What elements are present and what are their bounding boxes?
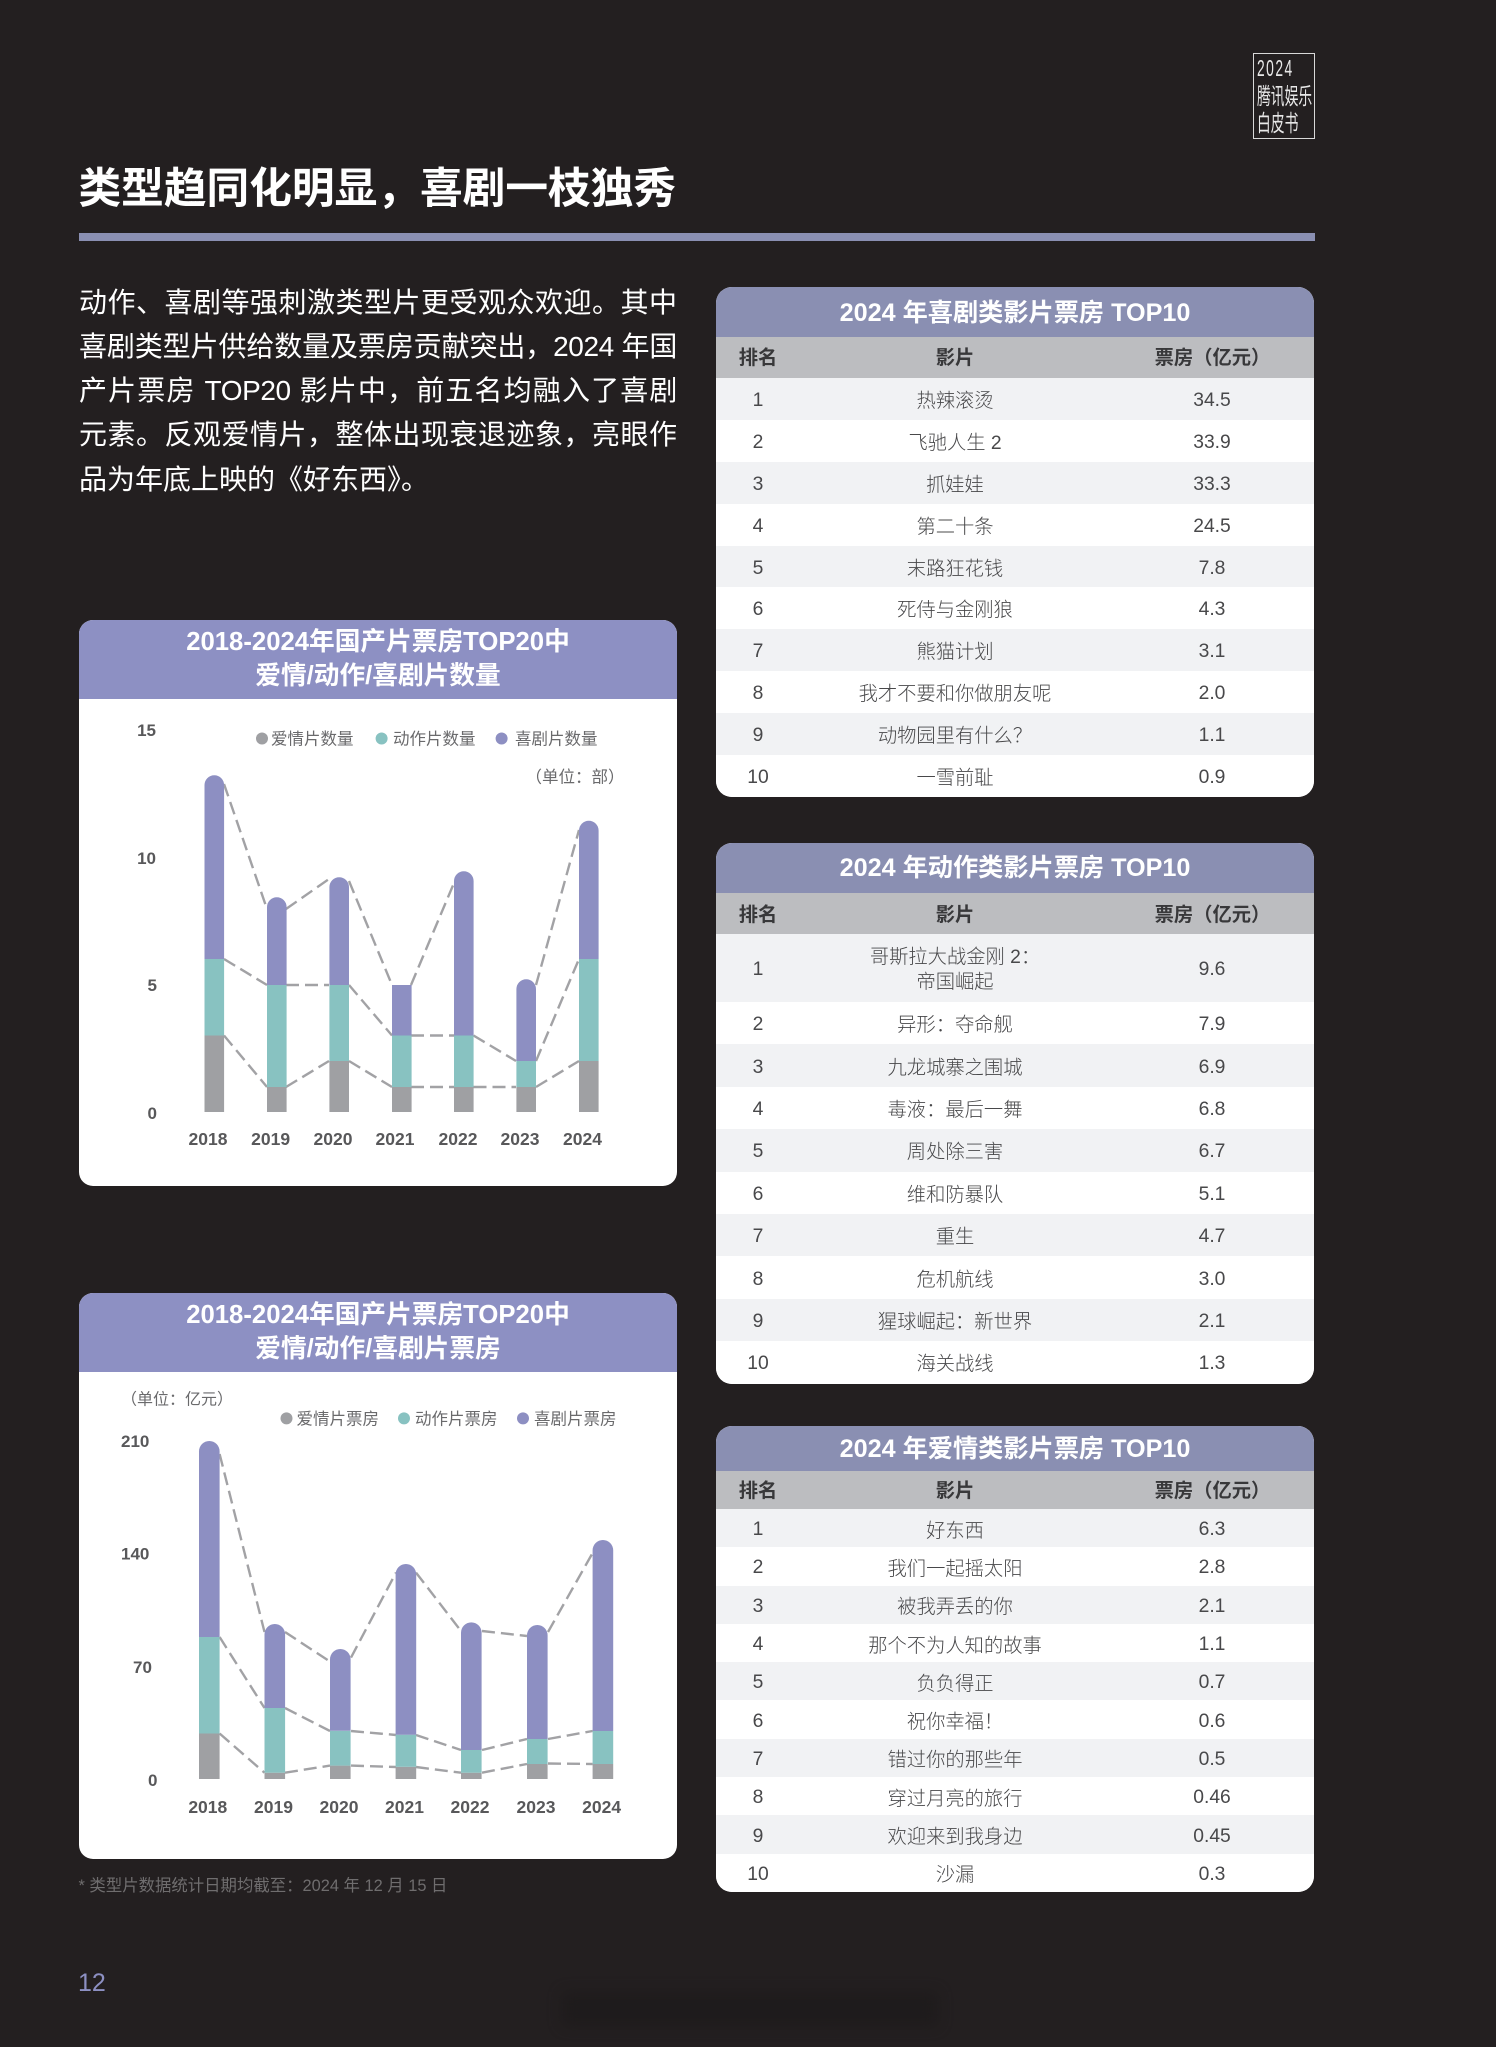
report badge: 2024 腾讯娱乐白皮书 — [1253, 53, 1315, 139]
rows: action films: 1 — [753, 959, 763, 980]
rows: comedy films — [716, 378, 1314, 797]
table: action top 10 — [716, 842, 1314, 1384]
rows: action films: 危机航线 — [916, 1270, 994, 1291]
rows: comedy films: 2.0 — [1199, 683, 1225, 704]
x axis years: 2018 — [188, 1797, 228, 1817]
intro paragraph: 产片票房 TOP20 影片中，前五名均融入了喜剧 — [79, 375, 677, 406]
y axis labels — [137, 721, 157, 1123]
column headers: 票房（亿元） — [1155, 905, 1270, 926]
bar 2024 — [579, 821, 599, 1112]
rows: action films: 3.0 — [1199, 1269, 1225, 1290]
table title: romance — [716, 1426, 1314, 1471]
rows: romance films: 7 — [753, 1749, 763, 1770]
rows: action films: 毒液：最后一舞 — [888, 1100, 1022, 1121]
rows: romance films: 那个不为人知的故事 — [868, 1636, 1042, 1657]
panel heading: box office: 2018-2024年国产片票房TOP20中 — [186, 1301, 570, 1329]
rows: action films: 重生 — [936, 1227, 974, 1248]
rows: comedy films: 末路狂花钱 — [907, 558, 1003, 580]
rows: action films: 7.9 — [1199, 1014, 1225, 1035]
rows: comedy films: 5 — [753, 558, 763, 578]
x axis years: 2022 — [451, 1797, 490, 1817]
column headers: 影片 — [936, 1481, 974, 1502]
column headers: 影片 — [936, 348, 974, 368]
rows: action films: 异形：夺命舰 — [897, 1015, 1013, 1036]
table title: romance: 2024 年爱情类影片票房 TOP10 — [840, 1434, 1190, 1462]
rows: comedy films: 4.3 — [1199, 599, 1225, 620]
rows: comedy films: 3 — [753, 474, 763, 495]
rows: romance films: 我们一起摇太阳 — [888, 1559, 1022, 1580]
rows: comedy films: 死侍与金刚狼 — [897, 600, 1013, 621]
rows: romance films: 0.45 — [1193, 1826, 1231, 1847]
rows: romance films: 3 — [753, 1596, 763, 1617]
rows: comedy films: 1.1 — [1199, 725, 1225, 746]
rows: comedy films: 我才不要和你做朋友呢 — [859, 684, 1051, 705]
table title: action — [716, 842, 1314, 892]
rows: romance films: 1 — [753, 1519, 763, 1540]
rows: comedy films: 3.1 — [1199, 641, 1225, 662]
rows: action films: 5 — [753, 1141, 763, 1162]
rows: action films: 周处除三害 — [907, 1142, 1003, 1163]
rows: comedy films: 8 — [753, 683, 763, 704]
x axis years — [188, 1797, 621, 1817]
title: 类型趋同化明显，喜剧一枝独秀 — [78, 165, 676, 213]
rows: action films: 7 — [753, 1226, 763, 1247]
rows: comedy films: 热辣滚烫 — [916, 391, 994, 412]
bar 2023 — [516, 979, 536, 1112]
rows: romance films: 2 — [753, 1557, 763, 1578]
rows: romance films: 0.5 — [1199, 1749, 1225, 1770]
intro paragraph: 动作、喜剧等强刺激类型片更受观众欢迎。其中 — [79, 286, 677, 318]
y axis labels — [121, 1432, 157, 1790]
rows: action films: 维和防暴队 — [907, 1185, 1003, 1206]
table title: comedy: 2024 年喜剧类影片票房 TOP10 — [840, 299, 1190, 327]
legend — [280, 1409, 616, 1428]
column headers: 排名 — [739, 905, 777, 926]
rows: romance films: 好东西 — [926, 1521, 984, 1542]
bar 2020 — [330, 1649, 351, 1779]
column headers: 影片 — [936, 905, 974, 926]
rows: action films: 6.9 — [1199, 1057, 1225, 1078]
bar 2021 — [396, 1564, 416, 1779]
x axis years: 2022 — [439, 1129, 478, 1149]
rows: romance films — [716, 1509, 1314, 1892]
rows: romance films: 错过你的那些年 — [888, 1750, 1022, 1771]
bar 2019 — [264, 1624, 285, 1779]
rows: romance films: 2.1 — [1199, 1596, 1225, 1617]
rows: action films: 海关战线 — [916, 1354, 994, 1375]
rows: comedy films: 0.9 — [1199, 767, 1225, 788]
x axis years: 2019 — [254, 1797, 293, 1817]
table title: action: 2024 年动作类影片票房 TOP10 — [840, 854, 1190, 882]
dashed trend lines — [220, 1454, 593, 1773]
rows: action films: 6.8 — [1199, 1099, 1225, 1120]
rows: comedy films: 动物园里有什么？ — [878, 726, 1032, 747]
bar 2024 — [593, 1540, 613, 1779]
y axis labels: 70 — [133, 1658, 152, 1677]
x axis years: 2018 — [189, 1129, 228, 1149]
panel heading: film count: 2018-2024年国产片票房TOP20中 — [186, 628, 570, 656]
column headers: 排名 — [739, 1481, 777, 1502]
x axis years: 2020 — [320, 1797, 359, 1817]
legend: 喜剧片数量 — [515, 730, 598, 748]
rows: comedy films: 7.8 — [1199, 558, 1225, 578]
rows: romance films: 0.46 — [1193, 1787, 1231, 1808]
rows: romance films: 6.3 — [1199, 1519, 1225, 1540]
x axis years: 2023 — [501, 1129, 540, 1149]
rows: comedy films: 2 — [753, 432, 763, 453]
x axis years: 2021 — [376, 1129, 415, 1149]
rows: action films: 1.3 — [1199, 1353, 1225, 1374]
rows: romance films: 负负得正 — [916, 1674, 994, 1695]
rows: romance films: 8 — [753, 1787, 763, 1808]
x axis years: 2024 — [582, 1797, 621, 1817]
rows: romance films: 10 — [747, 1864, 769, 1885]
rows: action films: 6 — [753, 1184, 763, 1205]
rows: romance films: 0.7 — [1199, 1672, 1225, 1693]
rows: romance films: 4 — [753, 1634, 763, 1655]
rows: action films: 4 — [753, 1099, 763, 1120]
rows: romance films: 穿过月亮的旅行 — [888, 1789, 1022, 1810]
faint watermark smudge — [562, 1992, 938, 2026]
y axis labels: 5 — [148, 976, 157, 995]
x axis years: 2021 — [385, 1797, 424, 1817]
x axis years: 2020 — [314, 1129, 353, 1149]
rows: romance films: 1.1 — [1199, 1634, 1225, 1655]
column headers — [716, 1471, 1314, 1509]
y axis labels: 15 — [137, 721, 156, 740]
rows: action films: 4.7 — [1199, 1226, 1225, 1247]
rows: romance films: 9 — [753, 1826, 763, 1847]
x axis years: 2019 — [251, 1129, 290, 1149]
rows: comedy films: 7 — [753, 641, 763, 662]
rows: action films: 3 — [753, 1057, 763, 1078]
rows: action films: 8 — [753, 1269, 763, 1290]
rows: action films: 2 — [753, 1014, 763, 1035]
y axis labels: 210 — [121, 1432, 149, 1451]
bar 2022 — [461, 1622, 482, 1779]
rows: comedy films: 10 — [747, 767, 769, 788]
panel heading: box office — [79, 1293, 677, 1372]
rows: comedy films: 6 — [753, 599, 763, 620]
table: comedy top 10 — [716, 287, 1314, 797]
column headers: 票房（亿元） — [1155, 1481, 1270, 1502]
rows: romance films: 5 — [753, 1672, 763, 1693]
rows: comedy films: 一雪前耻 — [916, 768, 994, 789]
y axis labels: 10 — [137, 849, 156, 868]
report badge: 2024 腾讯娱乐白皮书: 2024 — [1257, 55, 1294, 81]
column headers: 票房（亿元） — [1155, 348, 1270, 368]
y axis labels: 140 — [121, 1545, 149, 1564]
legend: 爱情片票房 — [296, 1409, 379, 1428]
rows: comedy films: 抓娃娃 — [926, 475, 984, 496]
table title: comedy — [716, 287, 1314, 337]
rows: comedy films: 9 — [753, 725, 763, 746]
rows: romance films: 2.8 — [1199, 1557, 1225, 1578]
bar 2022 — [454, 871, 474, 1112]
rows: action films — [716, 934, 1314, 1384]
rows: action films: 帝国崛起 — [916, 972, 994, 993]
panel: box office chart — [79, 1293, 677, 1859]
rows: action films: 猩球崛起：新世界 — [878, 1312, 1032, 1333]
bar 2018 — [199, 1441, 220, 1779]
rows: action films: 9 — [753, 1311, 763, 1332]
rows: romance films: 祝你幸福！ — [907, 1712, 1003, 1733]
x axis years — [189, 1129, 602, 1149]
rows: comedy films: 24.5 — [1193, 516, 1231, 537]
intro paragraph: 元素。反观爱情片，整体出现衰退迹象，亮眼作 — [79, 419, 677, 450]
table: romance top 10 — [716, 1426, 1314, 1892]
column headers — [716, 892, 1314, 934]
unit label: （单位：亿元） — [121, 1390, 233, 1408]
legend: 爱情片数量 — [271, 730, 354, 748]
bar 2019 — [267, 897, 287, 1112]
intro paragraph — [79, 286, 677, 495]
bar 2020 — [329, 877, 349, 1112]
bar 2023 — [527, 1625, 548, 1779]
rows: action films: 5.1 — [1199, 1184, 1225, 1205]
bar 2021 — [392, 985, 412, 1112]
rows: action films: 2.1 — [1199, 1311, 1225, 1332]
panel: film count chart — [79, 620, 677, 1186]
page number: 12 — [78, 1969, 106, 1997]
column headers — [716, 337, 1314, 378]
rows: comedy films: 1 — [753, 390, 763, 411]
rows: action films: 10 — [747, 1353, 769, 1374]
legend — [256, 730, 598, 748]
rows: comedy films: 熊猫计划 — [916, 642, 994, 663]
rows: comedy films: 4 — [753, 516, 763, 537]
panel heading: film count — [79, 620, 677, 699]
rows: romance films: 欢迎来到我身边 — [888, 1827, 1022, 1848]
rows: action films: 哥斯拉大战金刚 2： — [870, 946, 1040, 968]
rows: romance films: 6 — [753, 1711, 763, 1732]
stacked bar chart: film count — [137, 721, 624, 1149]
rows: comedy films: 33.9 — [1193, 432, 1231, 453]
legend: 动作片数量 — [393, 730, 476, 748]
x axis years: 2023 — [517, 1797, 556, 1817]
rows: romance films: 沙漏 — [936, 1865, 974, 1886]
bar 2018 — [204, 775, 224, 1112]
rows: romance films: 0.3 — [1199, 1864, 1225, 1885]
column headers: 排名 — [739, 348, 777, 368]
panel heading: box office: 爱情/动作/喜剧片票房 — [255, 1335, 501, 1363]
y axis labels: 0 — [148, 1771, 157, 1790]
rows: action films: 九龙城寨之围城 — [888, 1058, 1022, 1079]
rows: comedy films: 第二十条 — [916, 517, 994, 538]
intro paragraph: 品为年底上映的《好东西》。 — [79, 464, 429, 495]
rows: comedy films: 34.5 — [1193, 390, 1231, 411]
rows: comedy films: 飞驰人生 2 — [908, 433, 1002, 454]
report badge: 2024 腾讯娱乐白皮书: 白皮书 — [1257, 110, 1298, 136]
unit label: （单位：部） — [526, 768, 624, 786]
y axis labels: 0 — [148, 1104, 157, 1123]
rows: comedy films: 33.3 — [1193, 474, 1231, 495]
x axis years: 2024 — [563, 1129, 602, 1149]
title underline bar — [79, 233, 1315, 241]
rows: action films: 9.6 — [1199, 959, 1225, 980]
footnote: * 类型片数据统计日期均截至：2024 年 12 月 15 日 — [78, 1876, 447, 1894]
panel heading: film count: 爱情/动作/喜剧片数量 — [255, 662, 501, 690]
intro paragraph: 喜剧类型片供给数量及票房贡献突出，2024 年国 — [79, 331, 677, 362]
rows: romance films: 被我弄丢的你 — [897, 1597, 1013, 1618]
report badge: 2024 腾讯娱乐白皮书: 腾讯娱乐 — [1257, 82, 1312, 108]
legend: 喜剧片票房 — [534, 1409, 616, 1428]
legend: 动作片票房 — [415, 1409, 498, 1428]
rows: romance films: 0.6 — [1199, 1711, 1225, 1732]
dashed trend lines — [224, 784, 579, 1087]
rows: action films: 6.7 — [1199, 1141, 1225, 1162]
stacked bar chart: box office — [121, 1390, 621, 1817]
